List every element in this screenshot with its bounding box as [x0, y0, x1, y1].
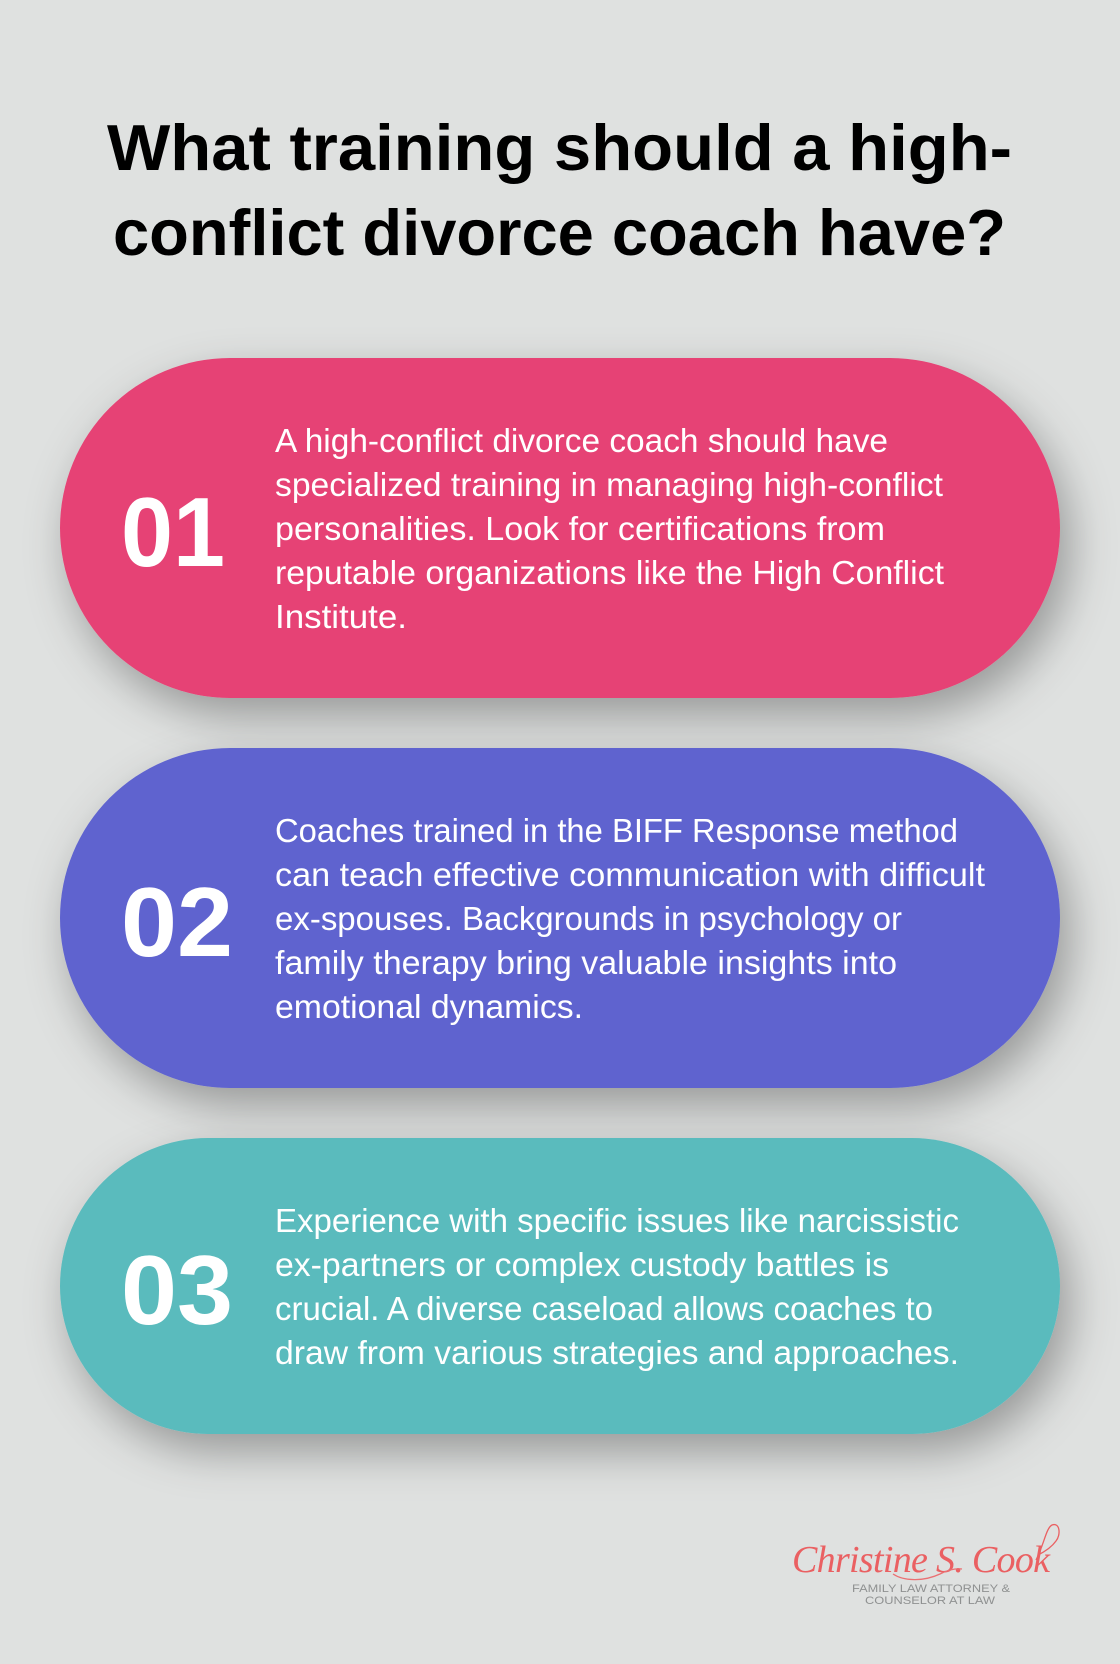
- text: step 02 description: ex-spouses. Backgrounds in psychology or: [275, 900, 902, 937]
- title: conflict divorce coach have?: [113, 196, 1006, 269]
- logo: Christine S. Cook: [792, 1525, 1059, 1607]
- text: step 03 description: Experience with specific issues like narcissistic: [275, 1202, 959, 1239]
- number 02: 02: [121, 867, 233, 977]
- text: step 02 description: [275, 812, 985, 1025]
- text: step 02 description: Coaches trained in the BIFF Response method: [275, 812, 958, 849]
- text: step 01 description: personalities. Look for certifications from: [275, 510, 885, 547]
- pill: step 02 background: [60, 748, 1060, 1088]
- text: step 02 description: can teach effective communication with difficult: [275, 856, 985, 893]
- text: step 02 description: family therapy bring valuable insights into: [275, 944, 897, 981]
- text: step 01 description: Institute.: [275, 598, 407, 635]
- text: step 01 description: reputable organizations like the High Conflict: [275, 554, 944, 591]
- text: step 01 description: A high-conflict divorce coach should have: [275, 422, 888, 459]
- panel: step 01: [60, 358, 1060, 698]
- number 01: 01: [121, 477, 225, 587]
- number 03: 03: [121, 1235, 233, 1345]
- panel: step 03: [60, 1138, 1060, 1434]
- text: step 01 description: specialized training in managing high-conflict: [275, 466, 943, 503]
- text: step 03 description: ex-partners or complex custody battles is: [275, 1246, 889, 1283]
- text: step 01 description: [275, 422, 944, 635]
- panel: step 02: [60, 748, 1060, 1088]
- title: [107, 111, 1012, 269]
- logo: Christine S. Cook: Christine S. Cook: [792, 1539, 1051, 1581]
- pill: step 03 background: [60, 1138, 1060, 1434]
- logo: Christine S. Cook: COUNSELOR AT LAW: [865, 1595, 996, 1607]
- text: step 03 description: draw from various strategies and approaches.: [275, 1334, 959, 1371]
- pill: step 01 background: [60, 358, 1060, 698]
- text: step 03 description: crucial. A diverse caseload allows coaches to: [275, 1290, 933, 1327]
- text: step 02 description: emotional dynamics.: [275, 988, 583, 1025]
- title: What training should a high-: [107, 111, 1012, 184]
- logo: Christine S. Cook: FAMILY LAW ATTORNEY &: [852, 1583, 1011, 1595]
- text: step 03 description: [275, 1202, 959, 1371]
